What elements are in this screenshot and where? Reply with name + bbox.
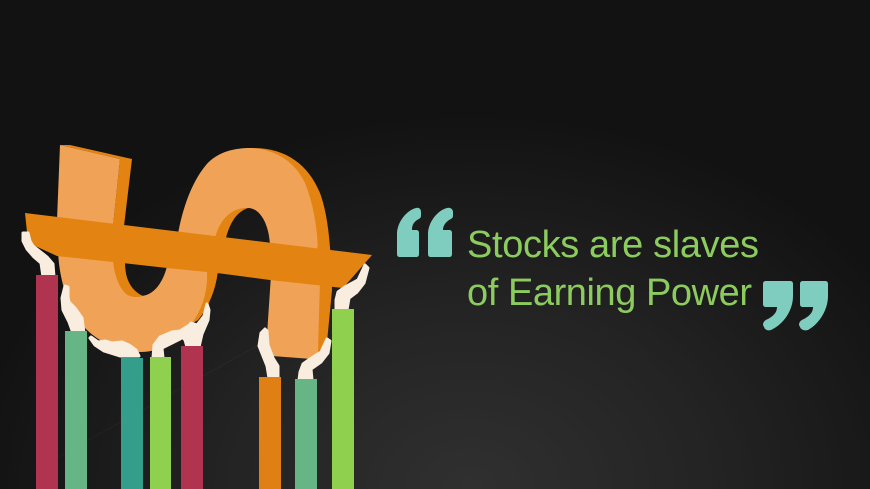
arm: orange (259, 377, 281, 489)
quote text: of Earning Power (467, 272, 752, 314)
dollar sign outer side faces (60, 145, 332, 354)
opening quotation mark (397, 208, 453, 257)
dollar sign front face (57, 145, 120, 226)
arm: lime (150, 357, 171, 489)
arm: green (65, 331, 87, 489)
hands (23, 233, 368, 380)
icon: dollar sign held by hands (23, 145, 372, 489)
arm: teal (121, 358, 143, 489)
arm: lime tall (332, 309, 354, 489)
arm: green right (295, 379, 317, 489)
closing quotation mark (763, 281, 828, 330)
dollar sign horizontal bar (25, 213, 372, 288)
quote text (467, 224, 759, 314)
quote text: Stocks are slaves (467, 224, 759, 266)
arm: crimson left (36, 275, 58, 489)
dollar sign inner side faces (113, 208, 248, 297)
arm: crimson right (181, 346, 203, 489)
